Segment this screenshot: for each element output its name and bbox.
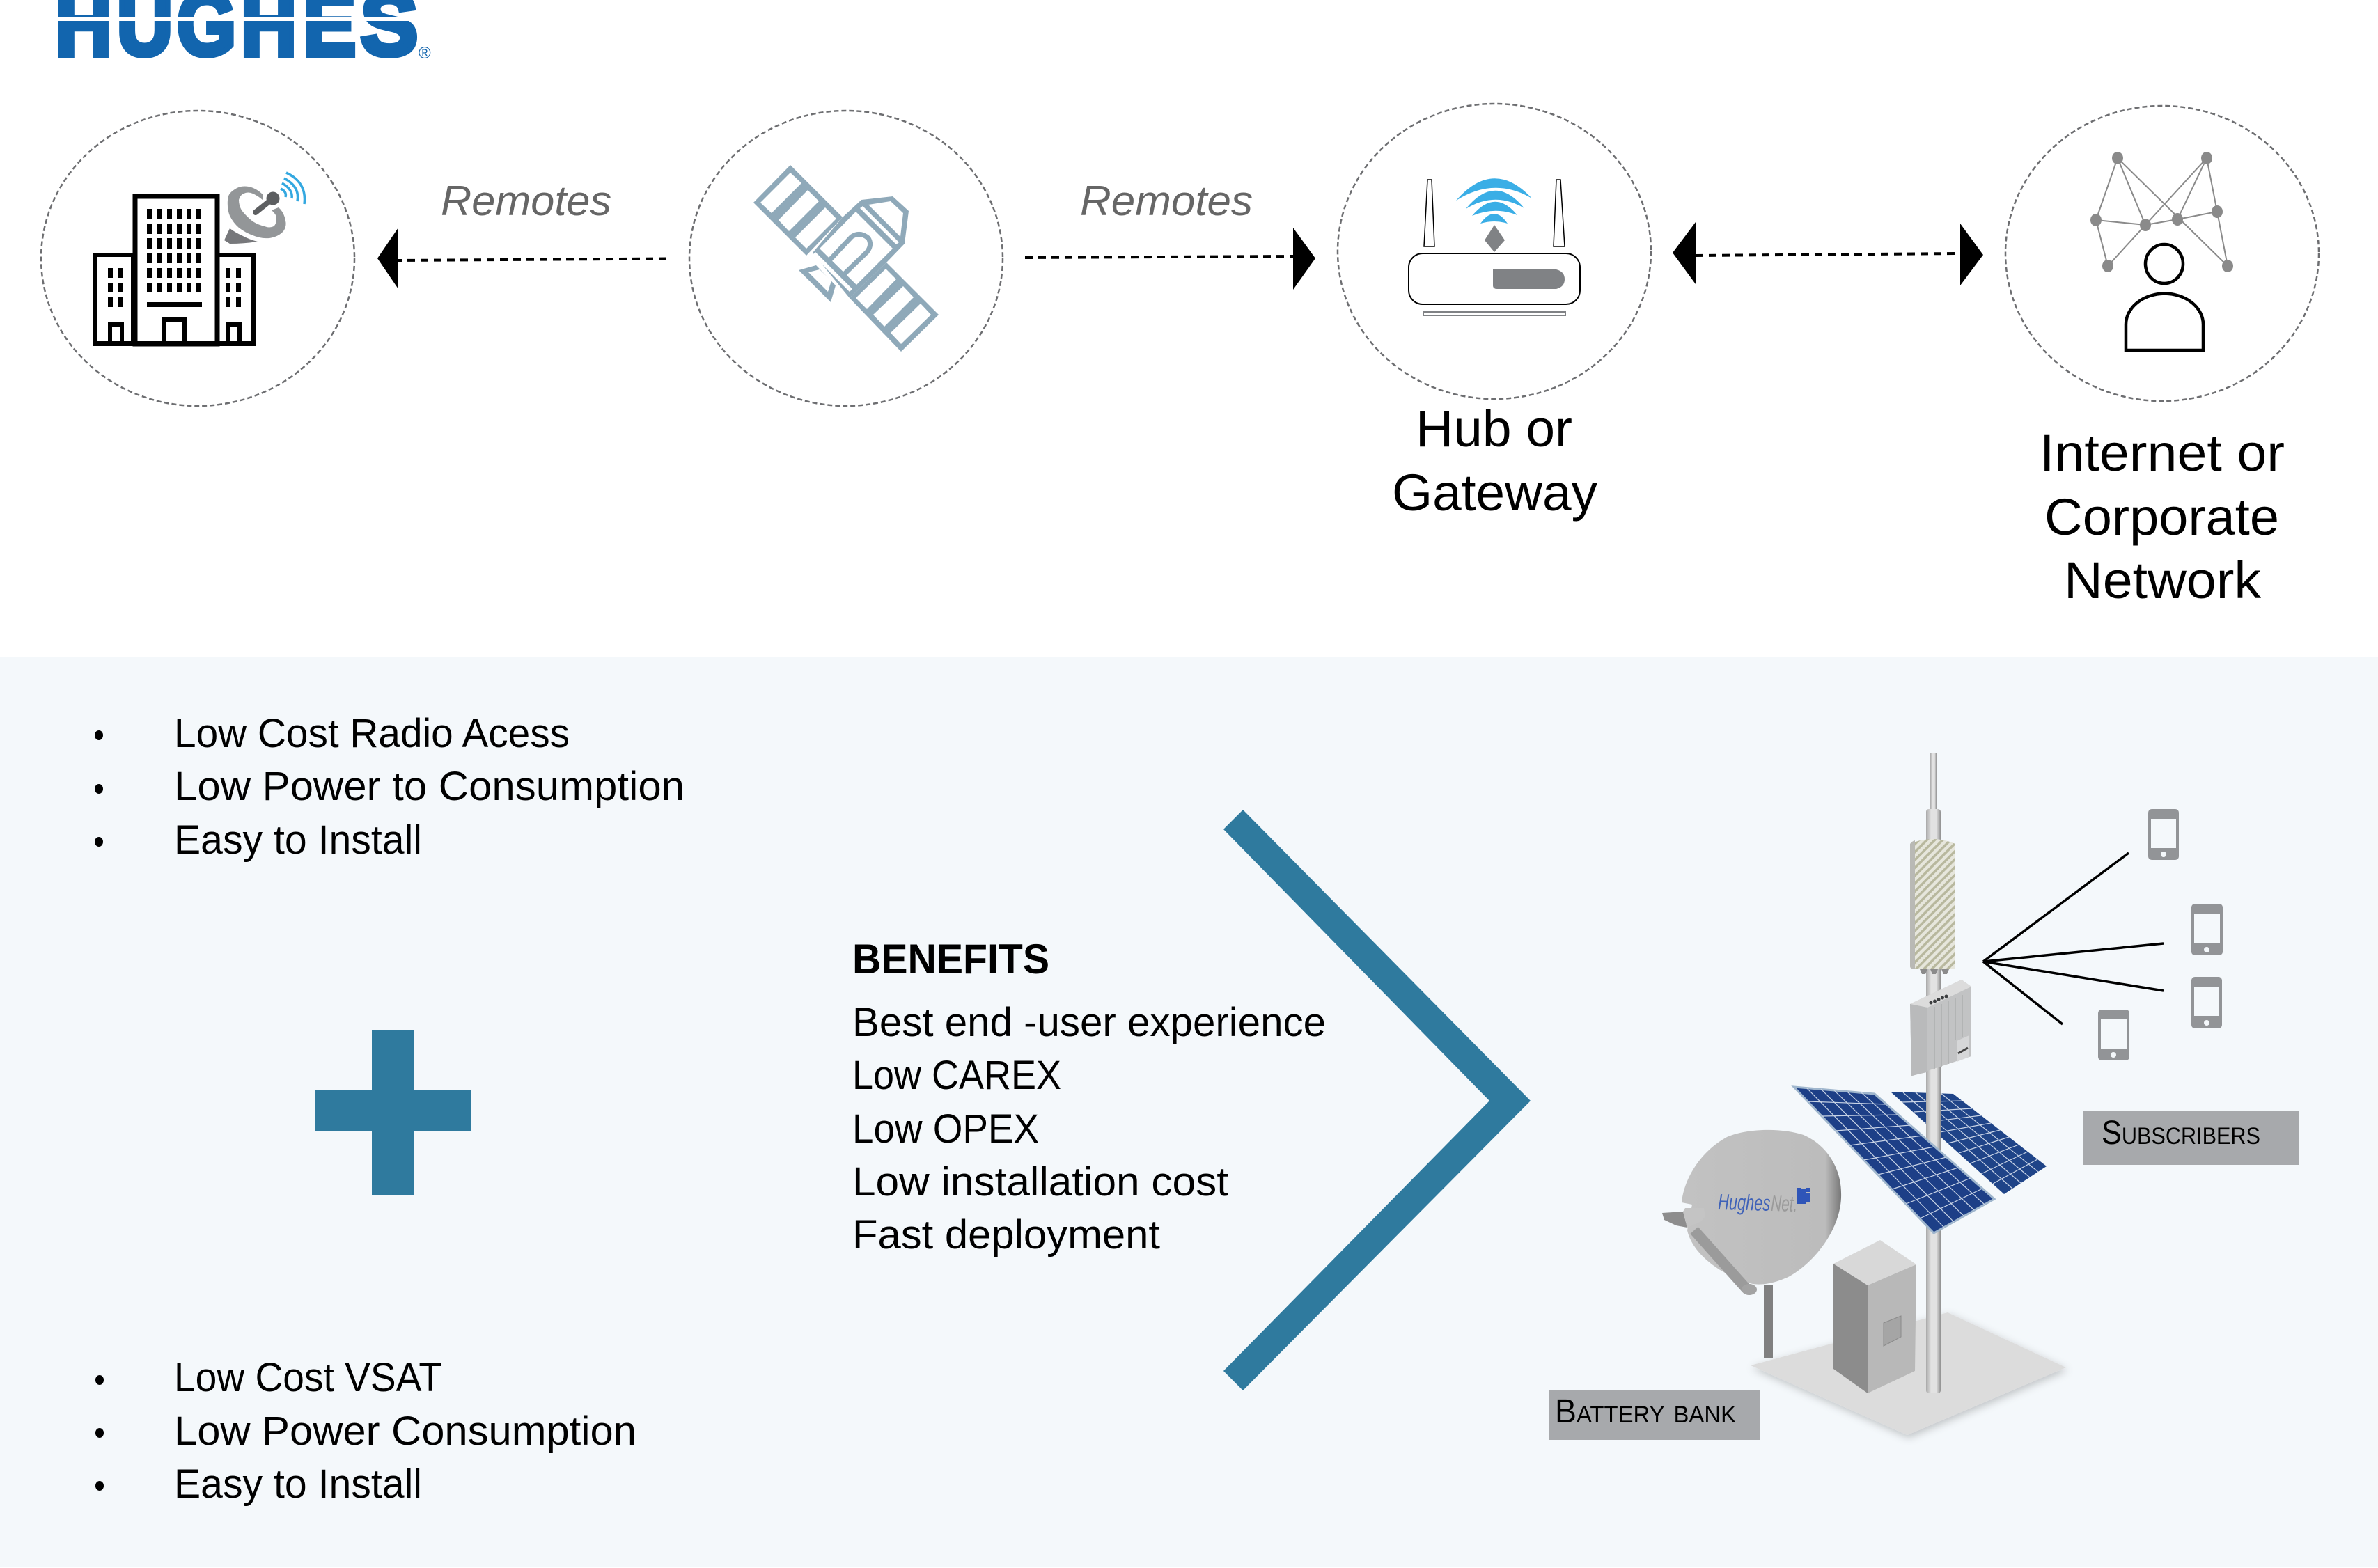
battery cabinet bbox=[1833, 1240, 1916, 1393]
list: VSAT features: Easy to Install bbox=[174, 1461, 422, 1507]
arrow: satellite to hub bbox=[1025, 228, 1315, 290]
label: subscribers bbox=[2083, 1111, 2299, 1165]
icon: building bbox=[93, 196, 256, 346]
platform bbox=[1751, 1312, 2066, 1435]
satellite dish bbox=[1662, 1130, 1841, 1295]
label: Hub or Gateway: Hub or bbox=[1416, 400, 1572, 457]
logo: Hughes bbox=[52, 0, 431, 75]
dashed circle bbox=[1338, 104, 1651, 399]
label: subscribers: Subscribers bbox=[2102, 1115, 2260, 1152]
radio unit bbox=[1910, 980, 1971, 1076]
list: radio access features bbox=[95, 711, 685, 863]
label: Remotes left: Remotes bbox=[441, 178, 611, 224]
icon: router bbox=[1409, 178, 1580, 315]
label: battery bank: Battery bank bbox=[1555, 1393, 1736, 1430]
dashed circle bbox=[41, 111, 354, 406]
list: VSAT features: Low Cost VSAT bbox=[174, 1355, 442, 1400]
text block: benefits: Low OPEX bbox=[852, 1106, 1039, 1152]
dashed circle bbox=[689, 111, 1003, 406]
list: radio access features: Low Power to Consumption bbox=[174, 764, 685, 809]
arrow: hub to network, two-way bbox=[1673, 222, 1983, 285]
icon: satellite bbox=[753, 165, 939, 352]
heading: benefits: BENEFITS bbox=[852, 936, 1049, 982]
list: radio access features: Easy to Install bbox=[174, 817, 422, 863]
text block: benefits: Fast deployment bbox=[852, 1212, 1160, 1257]
icon: person bbox=[2126, 244, 2203, 350]
text block: benefits: Best end -user experience bbox=[852, 1000, 1326, 1045]
arrow: satellite to remote bbox=[377, 228, 666, 289]
list: radio access features: Low Cost Radio Acess bbox=[174, 711, 570, 756]
logo: Hughes: ® bbox=[419, 44, 431, 63]
dashed circle bbox=[2005, 106, 2319, 401]
icon: phone 2 bbox=[2191, 904, 2223, 955]
icon: satellite dish with signal bbox=[224, 173, 304, 244]
icon: chevron bbox=[1223, 810, 1531, 1390]
antenna bbox=[1910, 839, 1955, 974]
label: Internet or Corporate Network: Internet or bbox=[2040, 424, 2285, 482]
list: VSAT features: Low Power Consumption bbox=[174, 1409, 636, 1454]
icon: phone 4 bbox=[2098, 1010, 2129, 1060]
dish brand: Net. bbox=[1771, 1191, 1798, 1216]
label: Remotes right: Remotes bbox=[1080, 178, 1253, 224]
text block: benefits: Low installation cost bbox=[852, 1159, 1228, 1205]
text block: benefits bbox=[852, 936, 1326, 1257]
icon: network graph bbox=[2090, 152, 2233, 272]
dish mast bbox=[1764, 1285, 1773, 1358]
icon: phone 3 bbox=[2191, 977, 2222, 1028]
panel: internet node bbox=[2005, 106, 2319, 401]
solar panel rear bbox=[1891, 1092, 2047, 1194]
dish brand: Hughes bbox=[1718, 1189, 1771, 1216]
label: battery bank bbox=[1549, 1390, 1760, 1440]
panel: satellite node bbox=[689, 111, 1003, 406]
list: VSAT features bbox=[95, 1355, 636, 1507]
label: Internet or Corporate Network: Corporate bbox=[2044, 488, 2279, 546]
label: Internet or Corporate Network: Network bbox=[2064, 551, 2262, 609]
label: Internet or Corporate Network bbox=[2040, 424, 2285, 609]
text block: benefits: Low CAREX bbox=[852, 1053, 1061, 1098]
label: Hub or Gateway: Gateway bbox=[1392, 464, 1597, 522]
icon: plus sign bbox=[315, 1030, 471, 1195]
icon: phone 1 bbox=[2148, 809, 2179, 860]
solar panel front bbox=[1794, 1087, 1994, 1233]
background: lower panel bbox=[0, 657, 2378, 1567]
panel: remote site node bbox=[41, 111, 354, 406]
label: Hub or Gateway bbox=[1392, 400, 1597, 522]
mast bbox=[1926, 753, 1941, 1393]
panel: hub node bbox=[1338, 104, 1651, 399]
illustration: solar powered radio site bbox=[1662, 753, 2066, 1435]
signal beams bbox=[1983, 853, 2164, 1024]
